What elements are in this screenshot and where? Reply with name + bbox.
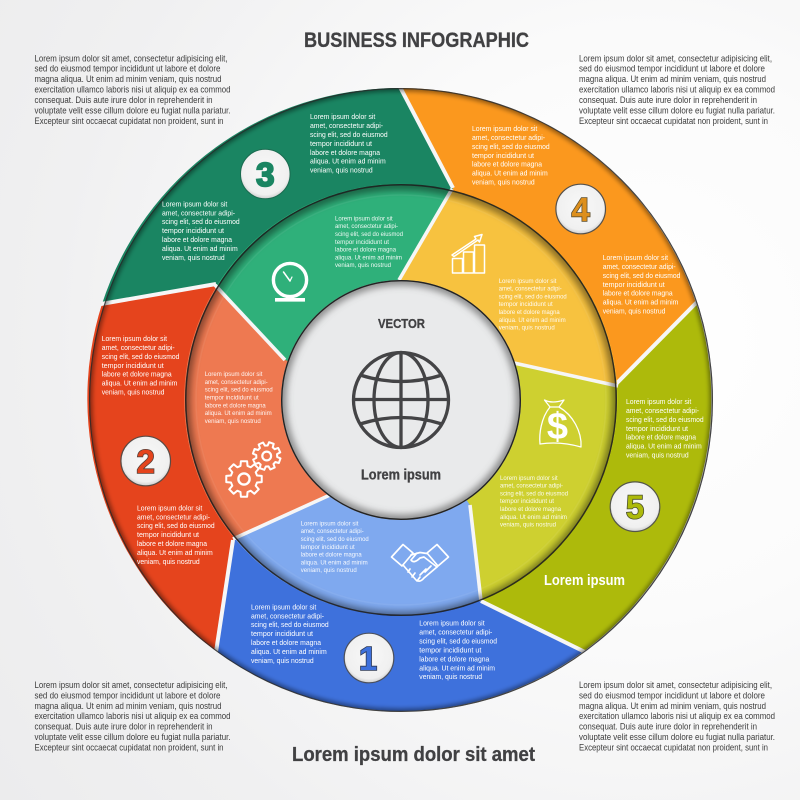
text: outer green 3b: amet, consectetur adipi- — [162, 208, 235, 217]
text: inner light blue: labore et dolore magna — [301, 552, 362, 559]
text: outer lime 5: tempor incididunt ut — [626, 424, 689, 433]
icon: money bag — [540, 400, 581, 448]
text: inner green: scing elit, sed do eiusmod — [335, 231, 403, 238]
text block: top right: consequat. Duis aute irure dolor in reprehenderit in — [579, 94, 757, 105]
text: outer red 2b: labore et dolore magna — [137, 539, 208, 548]
segment 3: green — [102, 88, 453, 400]
text block: bottom right — [579, 679, 775, 752]
text: outer red 2a: veniam, quis nostrud — [102, 388, 164, 396]
text: outer red 2b: aliqua. Ut enim ad minim — [137, 548, 213, 557]
text: inner yellow green: tempor incididunt ut — [500, 498, 554, 505]
text: outer blue 1b: veniam, quis nostrud — [419, 672, 482, 681]
text: inner yellow green: labore et dolore magna — [500, 506, 561, 513]
text block: bottom right: Excepteur sint occaecat cupidatat non proident, sunt in — [579, 741, 768, 752]
icon: clock — [273, 263, 307, 300]
text: outer blue 1a: labore et dolore magna — [251, 638, 322, 647]
text block: top left: voluptate velit esse cillum dolore eu fugiat nulla pariatur. — [34, 104, 230, 116]
outer ring dividers — [101, 87, 697, 652]
segment: coral — [184, 287, 401, 539]
text block: top left: consequat. Duis aute irure dolor in reprehenderit in — [34, 94, 212, 105]
number badge 3 — [240, 149, 290, 199]
text: inner yellow green: Lorem ipsum dolor sit — [500, 475, 558, 482]
text: inner light blue: tempor incididunt ut — [301, 544, 355, 551]
number badge 5: 5 — [626, 488, 644, 526]
text: inner green: aliqua. Ut enim ad minim — [335, 254, 402, 261]
text: inner coral: scing elit, sed do eiusmod — [205, 387, 273, 394]
text: outer red 2a: tempor incididunt ut — [102, 361, 165, 370]
number badge 3: 3 — [256, 156, 274, 193]
text: outer red 2b: amet, consectetur adipi- — [137, 512, 210, 521]
outer ring — [87, 87, 713, 712]
text: outer blue 1b — [419, 619, 497, 681]
text: outer red 2b: tempor incididunt ut — [137, 530, 200, 539]
text block: top left: exercitation ullamco laboris nisi ut aliquip ex ea commod — [34, 84, 230, 95]
text: outer orange 4b: aliqua. Ut enim ad minim — [603, 298, 678, 307]
text: inner yellow: aliqua. Ut enim ad minim — [499, 317, 566, 324]
text: outer blue 1b: Lorem ipsum dolor sit — [419, 619, 485, 628]
text: outer green 3b: veniam, quis nostrud — [162, 253, 225, 262]
text: inner yellow green: scing elit, sed do eiusmod — [500, 490, 568, 497]
text block: bottom right: sed do eiusmod tempor incididunt ut labore et dolore — [579, 689, 765, 700]
number badge 2 — [121, 436, 170, 486]
text: inner light blue: scing elit, sed do eiusmod — [301, 536, 369, 543]
text: outer lime 5: veniam, quis nostrud — [626, 450, 689, 460]
text block: bottom right: magna aliqua. Ut enim ad minim veniam, quis nostrud — [579, 700, 766, 711]
text: outer green 3a — [310, 112, 388, 175]
text: outer green 3a: amet, consectetur adipi- — [310, 121, 383, 130]
text: inner green: amet, consectetur adipi- — [335, 223, 398, 230]
text: outer red 2a — [102, 334, 179, 396]
text: inner yellow green: amet, consectetur adipi- — [500, 483, 563, 490]
text block: bottom left: magna aliqua. Ut enim ad minim veniam, quis nostrud — [34, 700, 222, 711]
text block: bottom left: exercitation ullamco laboris nisi ut aliquip ex ea commod — [34, 710, 230, 721]
text: outer red 2a: aliqua. Ut enim ad minim — [102, 379, 177, 388]
text block: bottom left: Lorem ipsum dolor sit amet, consectetur adipisicing elit, — [34, 679, 228, 690]
segment: yellow green — [401, 363, 617, 600]
icon: handshake — [392, 544, 448, 581]
text: outer orange 4b: amet, consectetur adipi- — [603, 262, 676, 271]
text block: bottom left: voluptate velit esse cillum dolore eu fugiat nulla pariatur. — [34, 731, 230, 742]
text: outer orange 4a: amet, consectetur adipi- — [472, 133, 545, 142]
text: outer orange 4a: labore et dolore magna — [472, 160, 543, 169]
text: outer lime 5: Lorem ipsum dolor sit — [626, 397, 692, 406]
text: inner yellow: veniam, quis nostrud — [499, 325, 555, 332]
text: outer red 2b: veniam, quis nostrud — [137, 557, 200, 566]
text: outer orange 4b: Lorem ipsum dolor sit — [603, 253, 669, 262]
text: inner coral — [205, 371, 273, 425]
text: outer orange 4b: tempor incididunt ut — [603, 280, 666, 289]
text: outer orange 4b: scing elit, sed do eiusmod — [603, 271, 680, 280]
center disc — [281, 280, 521, 520]
label: lime segment lorem ipsum: Lorem ipsum — [544, 573, 625, 589]
text: outer green 3a: Lorem ipsum dolor sit — [310, 112, 376, 121]
text: inner coral: aliqua. Ut enim ad minim — [205, 410, 272, 417]
text: inner green: veniam, quis nostrud — [335, 262, 391, 269]
text: outer green 3b: scing elit, sed do eiusmod — [162, 217, 240, 226]
title: BUSINESS INFOGRAPHIC — [304, 29, 529, 52]
text: inner coral: veniam, quis nostrud — [205, 418, 261, 425]
text: outer green 3b: Lorem ipsum dolor sit — [162, 199, 228, 208]
text: outer orange 4b: veniam, quis nostrud — [603, 306, 665, 316]
text: outer red 2b: Lorem ipsum dolor sit — [137, 503, 203, 512]
text: outer blue 1b: labore et dolore magna — [419, 654, 490, 663]
segment: medium green — [216, 184, 451, 400]
text: inner yellow: labore et dolore magna — [499, 309, 560, 316]
segment 5: lime — [401, 303, 711, 651]
text: inner yellow — [499, 278, 567, 332]
text: outer red 2a: Lorem ipsum dolor sit — [102, 334, 168, 343]
text: inner yellow: scing elit, sed do eiusmod — [499, 293, 567, 300]
text: outer green 3b: aliqua. Ut enim ad minim — [162, 244, 238, 253]
text block: top right: sed do eiusmod tempor incididunt ut labore et dolore — [579, 63, 765, 74]
text block: top left: Lorem ipsum dolor sit amet, consectetur adipisicing elit, — [34, 52, 228, 63]
text: inner yellow green — [500, 475, 568, 529]
text: outer orange 4a — [472, 124, 550, 186]
text: outer green 3a: labore et dolore magna — [310, 148, 381, 157]
number badge 1: 1 — [359, 640, 377, 677]
text: outer lime 5: amet, consectetur adipi- — [626, 406, 699, 415]
number badge 1 — [344, 633, 394, 683]
text: outer blue 1a — [251, 602, 329, 665]
text: inner light blue: amet, consectetur adipi- — [301, 528, 364, 535]
label: vector: VECTOR — [378, 317, 425, 331]
text: outer lime 5: aliqua. Ut enim ad minim — [626, 442, 702, 451]
text block: bottom left: consequat. Duis aute irure dolor in reprehenderit in — [34, 720, 212, 732]
text: inner light blue: Lorem ipsum dolor sit — [301, 520, 359, 527]
number badge 5 — [610, 482, 660, 532]
text block: top right — [579, 52, 775, 126]
text: outer lime 5: scing elit, sed do eiusmod — [626, 415, 704, 424]
segment: yellow — [399, 190, 617, 400]
segment 2: red — [87, 284, 401, 651]
text: outer blue 1b: aliqua. Ut enim ad minim — [419, 663, 495, 672]
text block: top left: sed do eiusmod tempor incididunt ut labore et dolore — [34, 63, 220, 74]
footer heading: Lorem ipsum dolor sit amet — [292, 743, 535, 766]
text: outer green 3b — [162, 199, 240, 262]
text: inner yellow green: veniam, quis nostrud — [500, 522, 556, 529]
text: inner coral: tempor incididunt ut — [205, 395, 259, 402]
text: outer green 3a: aliqua. Ut enim ad minim — [310, 157, 386, 166]
text: inner yellow green: aliqua. Ut enim ad minim — [500, 514, 567, 521]
text: inner coral: Lorem ipsum dolor sit — [205, 371, 263, 378]
icon: globe — [353, 352, 449, 448]
text: outer blue 1a: amet, consectetur adipi- — [251, 611, 324, 620]
segment: light blue — [235, 400, 481, 616]
text: outer orange 4a: scing elit, sed do eiusmod — [472, 142, 550, 151]
middle ring edge shading — [185, 184, 617, 617]
text: outer lime 5: labore et dolore magna — [626, 433, 697, 442]
text: inner light blue: aliqua. Ut enim ad minim — [301, 559, 368, 566]
icon: gears — [226, 438, 284, 497]
text block: bottom left: sed do eiusmod tempor incididunt ut labore et dolore — [34, 689, 220, 700]
text: outer lime 5 — [626, 397, 704, 460]
text: outer blue 1b: amet, consectetur adipi- — [419, 628, 493, 637]
text: outer orange 4a: Lorem ipsum dolor sit — [472, 124, 538, 133]
text: inner coral: labore et dolore magna — [205, 402, 266, 409]
text block: top left: magna aliqua. Ut enim ad minim veniam, quis nostrud — [34, 73, 222, 84]
text: outer blue 1b: scing elit, sed do eiusmod — [419, 637, 497, 646]
text: outer red 2a: labore et dolore magna — [102, 370, 172, 379]
text: inner yellow: tempor incididunt ut — [499, 301, 553, 308]
text block: bottom left: Excepteur sint occaecat cupidatat non proident, sunt in — [34, 741, 224, 752]
text: outer orange 4b — [603, 253, 680, 316]
segment 1: blue — [216, 400, 584, 711]
label: center lorem ipsum: Lorem ipsum — [361, 468, 441, 484]
text block: top right: magna aliqua. Ut enim ad minim veniam, quis nostrud — [579, 73, 766, 84]
text block: top left: Excepteur sint occaecat cupidatat non proident, sunt in — [34, 115, 224, 126]
text: outer red 2b: scing elit, sed do eiusmod — [137, 521, 215, 530]
text: outer red 2a: amet, consectetur adipi- — [102, 343, 175, 352]
text: inner yellow: Lorem ipsum dolor sit — [499, 278, 557, 285]
text block: top right: Excepteur sint occaecat cupidatat non proident, sunt in — [579, 115, 768, 126]
text: outer red 2a: scing elit, sed do eiusmod — [102, 352, 179, 361]
number badge 2: 2 — [137, 443, 155, 480]
text: outer blue 1a: scing elit, sed do eiusmod — [251, 620, 329, 629]
text block: bottom left — [34, 679, 230, 752]
text block: bottom right: consequat. Duis aute irure dolor in reprehenderit in — [579, 720, 757, 732]
number badge 4: 4 — [572, 191, 591, 228]
text: outer blue 1a: tempor incididunt ut — [251, 629, 314, 638]
icon: money bag: $ — [547, 406, 568, 448]
text: outer red 2b — [137, 503, 215, 566]
middle ring dividers — [215, 189, 618, 601]
text: outer orange 4a: veniam, quis nostrud — [472, 178, 535, 186]
text: outer blue 1a: Lorem ipsum dolor sit — [251, 602, 317, 611]
text: outer blue 1a: aliqua. Ut enim ad minim — [251, 647, 327, 656]
text: inner light blue: veniam, quis nostrud — [301, 567, 357, 574]
text: outer orange 4b: labore et dolore magna — [603, 289, 673, 298]
text: inner coral: amet, consectetur adipi- — [205, 379, 268, 386]
number badge 4 — [556, 184, 606, 234]
segment 4: orange — [400, 88, 696, 400]
text: inner green — [335, 215, 403, 269]
text: inner light blue — [301, 520, 369, 574]
text: outer green 3a: veniam, quis nostrud — [310, 166, 373, 175]
text: outer green 3a: scing elit, sed do eiusmod — [310, 130, 388, 139]
text: outer orange 4a: aliqua. Ut enim ad minim — [472, 169, 548, 178]
text: outer green 3a: tempor incididunt ut — [310, 139, 373, 148]
text: inner green: Lorem ipsum dolor sit — [335, 215, 393, 222]
text: inner yellow: amet, consectetur adipi- — [499, 286, 562, 293]
icon: growth chart — [452, 234, 484, 273]
text block: top left — [34, 52, 230, 126]
text: outer blue 1a: veniam, quis nostrud — [251, 656, 314, 665]
text: outer green 3b: tempor incididunt ut — [162, 226, 225, 235]
text: outer orange 4a: tempor incididunt ut — [472, 151, 535, 160]
text: inner green: tempor incididunt ut — [335, 239, 389, 246]
text: inner green: labore et dolore magna — [335, 247, 396, 254]
text: outer blue 1b: tempor incididunt ut — [419, 646, 482, 655]
text: outer green 3b: labore et dolore magna — [162, 235, 233, 244]
middle ring — [184, 184, 618, 617]
outer ring edge shading — [89, 88, 713, 712]
